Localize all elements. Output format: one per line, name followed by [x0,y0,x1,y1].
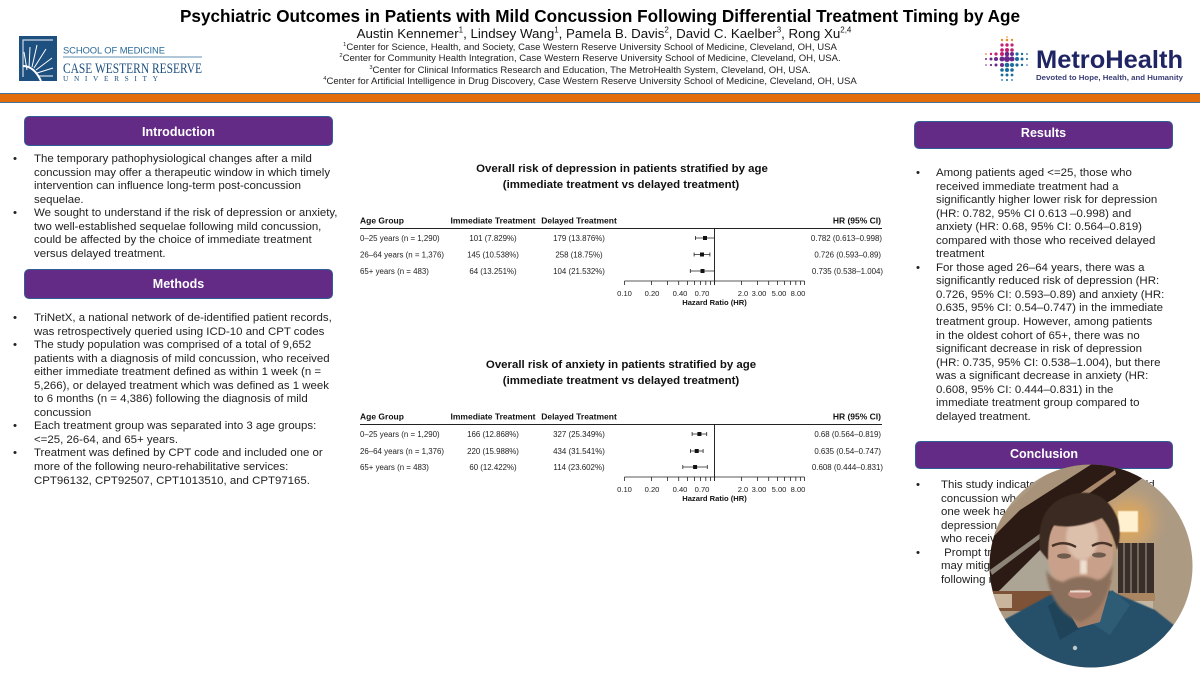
axis: 8.00 [791,485,805,494]
bullet markers: • [13,312,17,324]
axis [617,424,805,503]
orange divider band [0,93,1200,103]
table rows: 0–25 years (n = 1,290) [360,234,440,243]
heading: Methods [24,269,333,299]
table rows: 0.782 (0.613–0.998) [811,234,882,243]
affiliations: 1Center for Science, Health, and Society, Case Western Reserve University School of Medicine, Cleveland, OH, USA [343,42,837,53]
methods text: either immediate treatment defined as within 1 week (n = [34,366,321,378]
bullet markers: • [916,547,920,559]
logo: Case Western Reserve School of Medicine: UNIVERSITY [63,74,159,83]
introduction text: versus delayed treatment. [34,248,166,260]
table rows [360,430,883,472]
chart title: Overall risk of depression in patients stratified by age [476,163,768,175]
heading: Conclusion [915,441,1173,469]
introduction text: two well-established sequelae following mild concussion, [34,221,321,233]
bullet markers: • [916,262,920,274]
introduction text: The temporary pathophysiological changes after a mild [34,153,312,165]
chart title: (immediate treatment vs delayed treatment) [503,179,739,191]
table rows: 0.608 (0.444–0.831) [812,463,883,472]
logo: Case Western Reserve School of Medicine [19,36,202,83]
axis: 2.0 [738,485,748,494]
methods text: TriNetX, a national network of de-identified patient records, [34,312,332,324]
table rows: 166 (12.868%) [467,430,519,439]
conclusion text: depression and anxiety compared to those [941,520,1157,532]
table rows: 434 (31.541%) [553,447,605,456]
methods text: more of the following neuro-rehabilitative services: [34,461,288,473]
conclusion text: may mitigate psychiatric outcomes [941,560,1116,572]
table header: Age Group [360,216,404,226]
staircase [990,464,1142,594]
axis: 0.20 [645,289,659,298]
face [1047,518,1113,582]
results text: anxiety (HR: 0.68, 95% CI: 0.564–0.819) [936,221,1142,233]
methods text: concussion [34,407,91,419]
conclusion text: following mild concussion. [941,574,1073,586]
table rows: 101 (7.829%) [469,234,517,243]
bullet markers: • [13,339,17,351]
table header [360,216,881,226]
table rows: 327 (25.349%) [553,430,605,439]
results text: compared with those who received delayed [936,235,1155,247]
table rows: 26–64 years (n = 1,376) [360,250,444,260]
results text: (HR: 0.735, 95% CI: 0.538–1.004), but there [936,357,1160,369]
conclusion text: concussion who received treatment within [941,493,1153,505]
table header: Age Group [360,412,404,422]
axis: 0.40 [673,485,687,494]
results text: 0.726, 95% CI: 0.593–0.89) and anxiety (HR: [936,289,1164,301]
methods text: Each treatment group was separated into 3 age groups: [34,420,316,432]
panel: results [914,121,1173,423]
heading: Results: Results [1021,126,1066,140]
results text: significantly reduced risk of depression (HR: [936,275,1159,287]
bullet markers [13,153,17,219]
heading: Methods: Methods [153,277,204,291]
axis: Hazard Ratio (HR) [682,298,747,307]
panel: methods [13,269,333,487]
shelves [992,591,1054,611]
curtain [1118,543,1154,593]
table rows: 114 (23.602%) [553,463,605,472]
introduction text: sequelae. [34,194,84,206]
table rows: 0–25 years (n = 1,290) [360,430,440,439]
results text: 0.608, 95% CI: 0.444–0.831) in the [936,384,1113,396]
table rows: 258 (18.75%) [555,250,603,260]
bullet markers: • [13,420,17,432]
results text: significantly higher lower risk for depression [936,194,1157,206]
chart: forest plot of anxiety risk [360,359,883,503]
table header [360,412,881,422]
hazard ratio markers [683,432,707,469]
methods text: Treatment was defined by CPT code and included one or [34,447,323,459]
affiliations [323,42,857,87]
table header: HR (95% CI) [833,216,881,226]
axis: 0.10 [617,289,632,298]
mouth [1068,590,1092,598]
results text: was a significant decrease in anxiety (HR: [936,370,1148,382]
axis: 3.00 [752,289,766,298]
authors: Austin Kennemer1, Lindsey Wang1, Pamela B. Davis2, David C. Kaelber3, Rong Xu2,4 [357,26,851,41]
panel: introduction [13,116,337,260]
title: Psychiatric Outcomes in Patients with Mild Concussion Following Differential Treatment Timing by Age [180,6,1020,26]
methods text: patients with a diagnosis of mild concussion, who received [34,353,330,365]
introduction text: concussion may offer a therapeutic window in which timely [34,167,330,179]
results text: immediate treatment group compared to [936,397,1139,409]
heading: Results [914,121,1173,149]
heading: Conclusion: Conclusion [1010,447,1078,461]
introduction text: We sought to understand if the risk of depression or anxiety, [34,207,337,219]
table rows: 65+ years (n = 483) [360,463,429,472]
presenter video portrait [990,464,1192,668]
table rows: 0.726 (0.593–0.89) [814,250,881,260]
heading: Introduction [24,116,333,146]
conclusion text [941,479,1157,586]
axis: 3.00 [752,485,766,494]
table header: Delayed Treatment [541,412,617,422]
table rows: 65+ years (n = 483) [360,267,429,276]
results text: 0.635, 95% CI: 0.54–0.747) in the immediate [936,302,1163,314]
axis: 5.00 [772,485,786,494]
eyes and brows [1052,543,1112,547]
methods text [34,312,332,487]
axis: 0.20 [645,485,659,494]
axis: 2.0 [738,289,748,298]
hazard ratio markers [690,236,715,273]
axis: Hazard Ratio (HR) [682,494,747,503]
results text: treatment [936,248,984,260]
logo: MetroHealth: Devoted to Hope, Health, and Humanity [1036,73,1184,82]
table header: Delayed Treatment [541,216,617,226]
affiliations: 2Center for Community Health Integration, Case Western Reserve University School of Medicine, Cleveland, OH, USA. [339,53,841,64]
conclusion text: one week had a lower risk of developing [941,506,1144,518]
bullet markers: • [13,207,17,219]
results text: in the oldest cohort of 65+, there was no [936,330,1140,342]
table rows: 26–64 years (n = 1,376) [360,447,444,456]
chart title: (immediate treatment vs delayed treatment) [503,375,739,387]
table header: Immediate Treatment [450,216,536,226]
methods text: 5,266), or delayed treatment which was defined as 1 week [34,380,329,392]
table header: HR (95% CI) [833,412,881,422]
bullet markers [916,167,920,274]
logo: Case Western Reserve School of Medicine: SCHOOL OF MEDICINE [63,44,165,56]
introduction text: intervention can influence long-term post-concussion [34,180,301,192]
results text: received immediate treatment had a [936,181,1118,193]
results text: (HR: 0.782, 95% CI 0.613 –0.998) and [936,208,1131,220]
neck [1070,580,1112,628]
panel: conclusion [915,441,1173,586]
introduction text: could be affected by the choice of immediate treatment [34,234,312,246]
table rows: 64 (13.251%) [469,267,517,276]
chart title [476,163,768,191]
bullet markers [13,312,17,459]
logo: MetroHealth [985,36,1184,82]
bullet markers: • [13,153,17,165]
methods text: to 6 months (n = 4,386) following the diagnosis of mild [34,393,308,405]
results text [936,167,1164,423]
logo: MetroHealth: MetroHealth [1036,46,1183,74]
hair [1039,493,1120,560]
conclusion text: This study indicates that patients with mild [941,479,1155,491]
beard [1046,565,1113,622]
methods text: <=25, 26-64, and 65+ years. [34,434,178,446]
bullet markers: • [916,167,920,179]
chart title [486,359,756,387]
table rows: 104 (21.532%) [553,267,605,276]
table rows: 179 (13.876%) [553,234,605,243]
table rows: 220 (15.988%) [467,447,519,456]
table rows [360,234,883,276]
bullet markers: • [13,447,17,459]
chart title: Overall risk of anxiety in patients stratified by age [486,359,756,371]
conclusion text: who received delayed treatment. [941,533,1106,545]
axis: 0.70 [695,485,709,494]
table header: Immediate Treatment [450,412,536,422]
axis [617,228,805,307]
axis: 5.00 [772,289,786,298]
affiliations: 3Center for Clinical Informatics Research and Education, The MetroHealth System, Cleveland, OH, USA. [369,65,811,76]
methods text: CPT96132, CPT92507, CPT1013510, and CPT97165. [34,475,310,487]
conclusion text: Prompt treatment of mild concussion [944,547,1130,559]
table rows: 0.68 (0.564–0.819) [814,430,881,439]
results text: treatment group. However, among patients [936,316,1152,328]
affiliations: 4Center for Artificial Intelligence in Drug Discovery, Case Western Reserve University School of Medicine, Cleveland, OH, USA [323,76,857,87]
bullet markers [916,479,920,559]
table rows: 0.735 (0.538–1.004) [812,267,883,276]
chart: forest plot of depression risk [360,163,883,307]
axis: 8.00 [791,289,805,298]
methods text: The study population was comprised of a total of 9,652 [34,339,311,351]
results text: For those aged 26–64 years, there was a [936,262,1145,274]
bullet markers: • [916,479,920,491]
table rows: 0.635 (0.54–0.747) [814,447,881,456]
heading: Introduction: Introduction [142,125,215,139]
axis: 0.40 [673,289,687,298]
axis: 0.10 [617,485,632,494]
introduction text [34,153,337,260]
lower wall [993,550,1052,596]
results text: Among patients aged <=25, those who [936,167,1132,179]
table rows: 60 (12.422%) [469,463,517,472]
results text: significant decrease in risk of depression [936,343,1142,355]
table rows: 145 (10.538%) [467,250,519,260]
methods text: was retrospectively queried using ICD-10 and CPT codes [34,326,324,338]
results text: delayed treatment. [936,411,1031,423]
shirt [1004,590,1174,668]
axis: 0.70 [695,289,709,298]
